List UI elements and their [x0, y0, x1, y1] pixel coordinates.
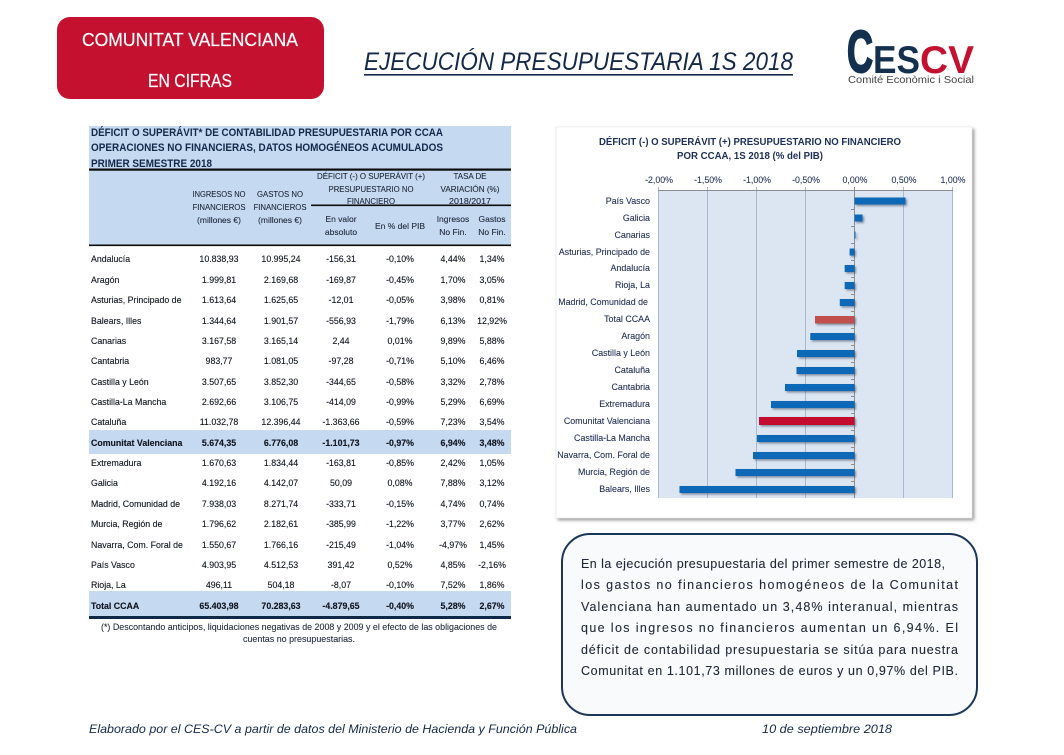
row: Cantabria: 6,46% [480, 356, 505, 366]
row: Cantabria: 983,77 [206, 356, 233, 366]
row: País Vasco: 4.903,95 [202, 560, 236, 570]
callout: summary text: que los ingresos no financieros aumentan un 6,94%. El [581, 621, 958, 635]
panel: budget table [89, 126, 511, 644]
column headers: (millones €) [197, 215, 241, 225]
row: Asturias: 1.613,64 [202, 295, 236, 305]
callout: summary text: En la ejecución presupuestaria del primer semestre de 2018, [581, 557, 945, 571]
row: Castilla-La Mancha: -0,99% [386, 397, 414, 407]
row: País Vasco: 4,85% [441, 560, 466, 570]
row: País Vasco: País Vasco [91, 560, 135, 570]
logo: CES CV [847, 19, 974, 86]
row: Asturias: -0,05% [386, 295, 414, 305]
table heading: DÉFICIT O SUPERÁVIT* DE CONTABILIDAD PRESUPUESTARIA POR CCAA [91, 126, 443, 139]
row: Extremadura: 1,05% [480, 458, 505, 468]
row: Cantabria: 5,10% [441, 356, 466, 366]
row: País Vasco: 391,42 [328, 560, 355, 570]
category labels: Murcia, Región de [578, 467, 650, 477]
row: Cataluña: 3,54% [480, 417, 505, 427]
category labels: Madrid, Comunidad de [558, 297, 648, 307]
axis labels: -1,00% [743, 175, 771, 185]
callout: summary text: Comunitat en 1.101,73 millones de euros y un 0,97% del PIB. [581, 664, 958, 678]
table heading: PRIMER SEMESTRE 2018 [91, 158, 212, 170]
row: Galicia: 0,08% [388, 478, 413, 488]
row: Cantabria [91, 356, 505, 366]
row: Madrid [91, 499, 505, 509]
row: Rioja: 496,11 [206, 580, 232, 590]
column headers: TASA DE [454, 171, 487, 181]
axis labels: 0,00% [843, 175, 868, 185]
category labels: Navarra, Com. Foral de [557, 450, 650, 460]
row: Madrid: -0,15% [386, 499, 414, 509]
row: Aragón [91, 275, 505, 285]
row: Aragón: 2.169,68 [264, 275, 298, 285]
row: Castilla-La Mancha: -414,09 [326, 397, 356, 407]
row: Canarias: 0,01% [388, 336, 413, 346]
row: Canarias: 2,44 [332, 336, 350, 346]
category labels: Comunitat Valenciana [564, 416, 650, 426]
row: Canarias: 5,88% [480, 336, 505, 346]
row: Canarias [91, 336, 505, 346]
row: Balears: 12,92% [477, 316, 507, 326]
category labels: Total CCAA [604, 314, 650, 324]
row: Total CCAA: 5,28% [441, 601, 466, 611]
axis labels: -1,50% [694, 175, 722, 185]
column headers: En valor [325, 214, 357, 224]
row: Cataluña [91, 417, 505, 427]
row: Murcia: -1,22% [386, 519, 414, 529]
logo: CES CV: CV [920, 39, 974, 82]
row: Castilla-La Mancha: 6,69% [480, 397, 505, 407]
category labels: Castilla y León [592, 348, 650, 358]
row: Balears: -1,79% [386, 316, 414, 326]
row: Navarra: 1.550,67 [202, 540, 236, 550]
column headers: No Fin. [439, 227, 467, 237]
column headers: (millones €) [258, 215, 302, 225]
row: Galicia: 3,12% [480, 478, 505, 488]
row: Comunitat Valenciana: -1.101,73 [322, 438, 360, 448]
category labels: Rioja, La [615, 280, 650, 290]
title: EJECUCIÓN PRESUPUESTARIA 1S 2018 [364, 47, 793, 76]
row: Andalucía: 10.995,24 [261, 254, 301, 264]
table heading [91, 126, 443, 170]
table footnote: cuentas no presupuestarias. [243, 634, 355, 644]
row: Murcia [91, 519, 505, 529]
row: Navarra: Navarra, Com. Foral de [91, 540, 183, 550]
row: Galicia: 4.192,16 [202, 478, 236, 488]
column headers: Ingresos [437, 214, 469, 224]
row: Cataluña: 11.032,78 [200, 417, 238, 427]
row: Asturias: 1.625,65 [264, 295, 298, 305]
row: Castilla y León: 3.852,30 [264, 377, 298, 387]
badge: Comunitat Valenciana en cifras [57, 17, 324, 99]
row: Navarra [91, 540, 505, 550]
row: Castilla y León: 3,32% [441, 377, 466, 387]
row: Rioja [91, 580, 505, 590]
category labels: Andalucía [611, 263, 650, 273]
row: Madrid: 0,74% [480, 499, 505, 509]
row: Total CCAA: -0,40% [386, 601, 414, 611]
row: Murcia: 1.796,62 [202, 519, 236, 529]
row: Galicia: 7,88% [441, 478, 466, 488]
row: Cantabria: -0,71% [386, 356, 414, 366]
row: Andalucía: -0,10% [386, 254, 414, 264]
column headers: INGRESOS NO [192, 189, 246, 199]
row: Rioja: -8,07 [331, 580, 351, 590]
callout: summary text: déficit de contabilidad presupuestaria se sitúa para nuestra [581, 643, 958, 657]
category labels: Aragón [621, 331, 650, 341]
row: Murcia: 2.182,61 [264, 519, 298, 529]
row: Galicia: 50,09 [330, 478, 352, 488]
axis labels: 1,00% [941, 175, 966, 185]
row: Madrid: -333,71 [326, 499, 356, 509]
column headers: Gastos [479, 214, 505, 224]
row: Comunitat Valenciana: 6,94% [441, 438, 466, 448]
row: Extremadura: Extremadura [91, 458, 141, 468]
row: Asturias: -12,01 [329, 295, 354, 305]
row: Total CCAA: 2,67% [480, 601, 505, 611]
row: Madrid: Madrid, Comunidad de [91, 499, 180, 509]
row: Andalucía: Andalucía [91, 254, 130, 264]
row: Extremadura: -0,85% [386, 458, 414, 468]
row: Asturias [91, 295, 505, 305]
row: Andalucía: -156,31 [326, 254, 356, 264]
column headers [192, 171, 506, 237]
row: Castilla-La Mancha: Castilla-La Mancha [91, 397, 166, 407]
row: Canarias: 3.167,58 [202, 336, 236, 346]
row: Rioja: 1,86% [480, 580, 505, 590]
logo: CES CV: C [847, 19, 873, 85]
row: País Vasco: 4.512,53 [264, 560, 298, 570]
row: Balears: 1.901,57 [264, 316, 298, 326]
row: Castilla-La Mancha: 3.106,75 [264, 397, 298, 407]
row: Extremadura: -163,81 [326, 458, 356, 468]
row: Asturias: Asturias, Principado de [91, 295, 182, 305]
row: Balears [91, 316, 507, 326]
row: Murcia: 2,62% [480, 519, 505, 529]
row: Murcia: 3,77% [441, 519, 466, 529]
row: Galicia: 4.142,07 [264, 478, 298, 488]
category labels: Galicia [623, 213, 650, 223]
column headers: GASTOS NO [257, 189, 303, 199]
row: Andalucía: 1,34% [480, 254, 505, 264]
column headers: FINANCIEROS [254, 202, 307, 212]
row: Castilla y León: 3.507,65 [202, 377, 236, 387]
chart title: POR CCAA, 1S 2018 (% del PIB) [677, 150, 823, 162]
row: Cataluña: Cataluña [91, 417, 126, 427]
row: Asturias: 3,98% [441, 295, 466, 305]
category labels: País Vasco [606, 196, 650, 206]
category labels: Canarias [614, 230, 651, 240]
category labels: Extremadura [599, 399, 650, 409]
row: País Vasco: 0,52% [388, 560, 413, 570]
row: Aragón: 3,05% [480, 275, 505, 285]
column headers: FINANCIEROS [192, 202, 246, 212]
callout: summary text: Valenciana han aumentado un 3,48% interanual, mientras [581, 600, 958, 614]
table heading: OPERACIONES NO FINANCIERAS, DATOS HOMOGÉNEOS ACUMULADOS [91, 141, 443, 154]
chart title [599, 135, 901, 162]
category labels [557, 196, 651, 494]
row: Canarias: Canarias [91, 336, 127, 346]
row: Cataluña: 7,23% [441, 417, 466, 427]
chart title: DÉFICIT (-) O SUPERÁVIT (+) PRESUPUESTARIO NO FINANCIERO [599, 135, 901, 148]
row: Total CCAA: 70.283,63 [261, 601, 301, 611]
row: Aragón: 1,70% [441, 275, 466, 285]
row: Extremadura: 1.834,44 [264, 458, 298, 468]
row: Total CCAA: Total CCAA [91, 601, 140, 611]
column headers: DÉFICIT (-) O SUPERÁVIT (+) [317, 171, 425, 181]
row: Navarra: 1,45% [480, 540, 505, 550]
row: Navarra: 1.766,16 [264, 540, 298, 550]
row: Galicia [91, 478, 505, 488]
row: Balears: 1.344,64 [202, 316, 236, 326]
row: Balears: -556,93 [326, 316, 356, 326]
row: Comunitat Valenciana: -0,97% [386, 438, 414, 448]
row: País Vasco: -2,16% [478, 560, 506, 570]
row: Andalucía: 10.838,93 [199, 254, 239, 264]
row: Cantabria: -97,28 [329, 356, 354, 366]
table footnote: (*) Descontando anticipos, liquidaciones negativas de 2008 y 2009 y el efecto de las obligaciones de [101, 622, 497, 632]
axis labels: -2,00% [645, 175, 673, 185]
row: Madrid: 8.271,74 [264, 499, 298, 509]
table footnote [101, 622, 497, 644]
category labels: Cataluña [614, 365, 650, 375]
column headers: No Fin. [478, 227, 506, 237]
callout: summary text: los gastos no financieros homogéneos de la Comunitat [581, 578, 959, 592]
row: Comunitat Valenciana [91, 438, 505, 448]
row: Castilla y León [91, 377, 505, 387]
row: Balears: Balears, Illes [91, 316, 142, 326]
row: Navarra: -4,97% [439, 540, 467, 550]
row: Madrid: 4,74% [441, 499, 466, 509]
row: Extremadura: 2,42% [441, 458, 466, 468]
column headers: VARIACIÓN (%) [440, 184, 500, 194]
row: Rioja: Rioja, La [91, 580, 126, 590]
axis labels [645, 175, 966, 185]
row: Castilla y León: -344,65 [326, 377, 356, 387]
row: Aragón: -169,87 [326, 275, 356, 285]
row: Aragón: -0,45% [386, 275, 414, 285]
table header background [89, 126, 511, 245]
row: Navarra: -215,49 [326, 540, 356, 550]
logo: CES CV: Comité Econòmic i Social [848, 74, 974, 86]
row: Canarias: 9,89% [441, 336, 466, 346]
row: Extremadura [91, 458, 505, 468]
column headers: PRESUPUESTARIO NO [328, 184, 414, 194]
row: Comunitat Valenciana: 5.674,35 [202, 438, 236, 448]
category labels: Cantabria [612, 382, 650, 392]
row: Castilla-La Mancha: 2.692,66 [202, 397, 236, 407]
row: Extremadura: 1.670,63 [202, 458, 236, 468]
row: Rioja: 504,18 [268, 580, 295, 590]
row: Comunitat Valenciana: Comunitat Valenciana [91, 438, 183, 448]
badge: Comunitat Valenciana en cifras: EN CIFRAS [148, 70, 232, 91]
row: Galicia: Galicia [91, 478, 118, 488]
panel: bar chart [556, 127, 972, 518]
column headers: En % del PIB [375, 221, 425, 231]
plot area [658, 187, 953, 498]
row: Castilla-La Mancha [91, 397, 505, 407]
row: Total CCAA: -4.879,65 [322, 601, 360, 611]
row: Cataluña: -1.363,66 [322, 417, 360, 427]
footer: source: Elaborado por el CES-CV a partir de datos del Ministerio de Hacienda y Función Pública [89, 722, 577, 736]
column headers: FINANCIERO [347, 196, 395, 206]
bars [680, 198, 906, 493]
row: Canarias: 3.165,14 [264, 336, 298, 346]
row: Rioja: 7,52% [441, 580, 466, 590]
axis labels: -0,50% [792, 175, 820, 185]
axis labels: 0,50% [892, 175, 917, 185]
row: Castilla y León: 2,78% [480, 377, 505, 387]
row: Navarra: -1,04% [386, 540, 414, 550]
row: Castilla y León: -0,58% [386, 377, 414, 387]
row: Rioja: -0,10% [386, 580, 414, 590]
logo: CES CV: ES [873, 39, 920, 82]
row: Comunitat Valenciana: 3,48% [480, 438, 505, 448]
row: Castilla-La Mancha: 5,29% [441, 397, 466, 407]
row: País Vasco [91, 560, 506, 570]
callout: summary text [562, 534, 977, 715]
row: Andalucía [91, 254, 505, 264]
footer: date: 10 de septiembre 2018 [762, 722, 892, 736]
row: Asturias: 0,81% [480, 295, 505, 305]
row: Cantabria: 1.081,05 [264, 356, 298, 366]
column headers: 2018/2017 [449, 196, 491, 206]
category labels: Castilla-La Mancha [574, 433, 650, 443]
row: Andalucía: 4,44% [441, 254, 466, 264]
row: Madrid: 7.938,03 [202, 499, 236, 509]
row: Cataluña: 12.396,44 [261, 417, 301, 427]
row: Comunitat Valenciana: 6.776,08 [264, 438, 298, 448]
row: Cataluña: -0,59% [386, 417, 414, 427]
row: Aragón: Aragón [91, 275, 119, 285]
row: Murcia: Murcia, Región de [91, 519, 162, 529]
column headers: absoluto [325, 227, 357, 237]
row: Total CCAA [91, 601, 505, 611]
row: Aragón: 1.999,81 [202, 275, 236, 285]
row: Cantabria: Cantabria [91, 356, 129, 366]
category labels: Balears, Illes [599, 484, 651, 494]
row: Total CCAA: 65.403,98 [199, 601, 239, 611]
row: Balears: 6,13% [441, 316, 466, 326]
row: Castilla y León: Castilla y León [91, 377, 149, 387]
row: Murcia: -385,99 [326, 519, 356, 529]
category labels: Asturias, Principado de [559, 247, 650, 257]
badge: Comunitat Valenciana en cifras: COMUNITAT VALENCIANA [82, 29, 299, 50]
